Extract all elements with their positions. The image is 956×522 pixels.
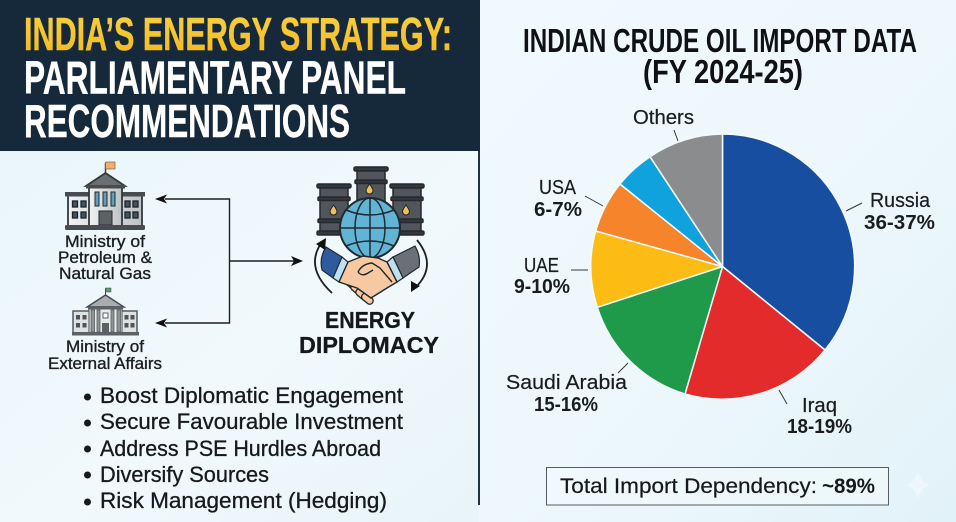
label: Energy Diplomacy	[299, 307, 439, 358]
label: USA: USA	[539, 177, 577, 199]
callout: total import dependency: ~89%	[822, 475, 875, 498]
label: USA	[534, 177, 582, 221]
bullet list: Risk Management (Hedging)	[100, 488, 387, 513]
globe	[340, 198, 400, 258]
label: Ministry of Petroleum & Natural Gas	[58, 232, 153, 283]
title banner	[0, 0, 480, 151]
title line: India's Energy Strategy: INDIA’S ENERGY STRATEGY:	[24, 8, 452, 60]
label: Ministry of External Affairs: Ministry of	[66, 338, 144, 356]
icon: sparkle watermark	[905, 470, 931, 500]
icon: oil barrels, globe and handshake	[315, 167, 427, 306]
fingers	[344, 277, 375, 306]
label: Saudi Arabia: Saudi Arabia	[506, 372, 628, 394]
bullet list: Boost Diplomatic Engagement	[100, 383, 403, 408]
panel divider	[478, 151, 480, 505]
label: UAE	[514, 255, 570, 298]
slice: USA	[596, 184, 722, 266]
handshake	[321, 247, 342, 278]
oil barrels	[317, 167, 424, 235]
label: Ministry of Petroleum & Natural Gas: Ministry of	[65, 232, 145, 251]
label: USA: 6-7%	[534, 199, 582, 221]
chart title	[523, 22, 917, 90]
slice: Iraq	[685, 266, 825, 399]
bullet list: Secure Favourable Investment	[100, 409, 403, 434]
label: Russia	[864, 190, 935, 234]
label: Ministry of External Affairs: External Affairs	[48, 355, 162, 373]
chart title: (FY 2024-25)	[643, 53, 803, 90]
label: Ministry of External Affairs	[48, 338, 162, 373]
label: Ministry of Petroleum & Natural Gas: Petroleum &	[58, 248, 153, 267]
bullet list	[84, 383, 403, 513]
label: Energy Diplomacy: DIPLOMACY	[299, 332, 439, 358]
bullet list: Diversify Sources	[100, 462, 269, 487]
pie chart	[591, 134, 855, 399]
arrows: ministries to energy diplomacy	[155, 194, 303, 328]
slice: Saudi Arabia	[597, 266, 722, 394]
icon: petroleum ministry building	[65, 162, 145, 230]
title line: Parliamentary Panel: PARLIAMENTARY PANEL	[24, 52, 406, 104]
label: UAE: 9-10%	[514, 276, 570, 298]
label: Russia: 36-37%	[864, 212, 935, 234]
label: Energy Diplomacy: ENERGY	[325, 307, 415, 333]
slice: UAE	[591, 231, 722, 307]
label: Saudi Arabia	[506, 372, 628, 416]
icon: external affairs ministry building	[72, 288, 139, 336]
slice: Russia	[722, 134, 855, 350]
bullet list: Address PSE Hurdles Abroad	[100, 436, 381, 461]
label: Others: Others	[633, 107, 694, 129]
panel: right background	[479, 0, 956, 522]
label: Iraq	[787, 395, 852, 438]
panel: left background	[0, 151, 479, 522]
label: Russia: Russia	[870, 190, 931, 212]
leader lines	[571, 130, 862, 404]
label: Saudi Arabia: 15-16%	[534, 394, 598, 416]
circular arrows	[315, 240, 427, 293]
label: Iraq: 18-19%	[787, 416, 852, 438]
label: UAE: UAE	[524, 255, 559, 277]
slice: unlabeled blue	[620, 157, 722, 266]
callout: total import dependency	[546, 468, 888, 505]
callout: total import dependency: Total Import Dependency:	[560, 475, 817, 498]
label: Ministry of Petroleum & Natural Gas: Natural Gas	[59, 264, 151, 283]
slice: Others	[650, 134, 722, 266]
title line: Recommendations: RECOMMENDATIONS	[24, 95, 350, 147]
label: Iraq: Iraq	[802, 395, 837, 417]
